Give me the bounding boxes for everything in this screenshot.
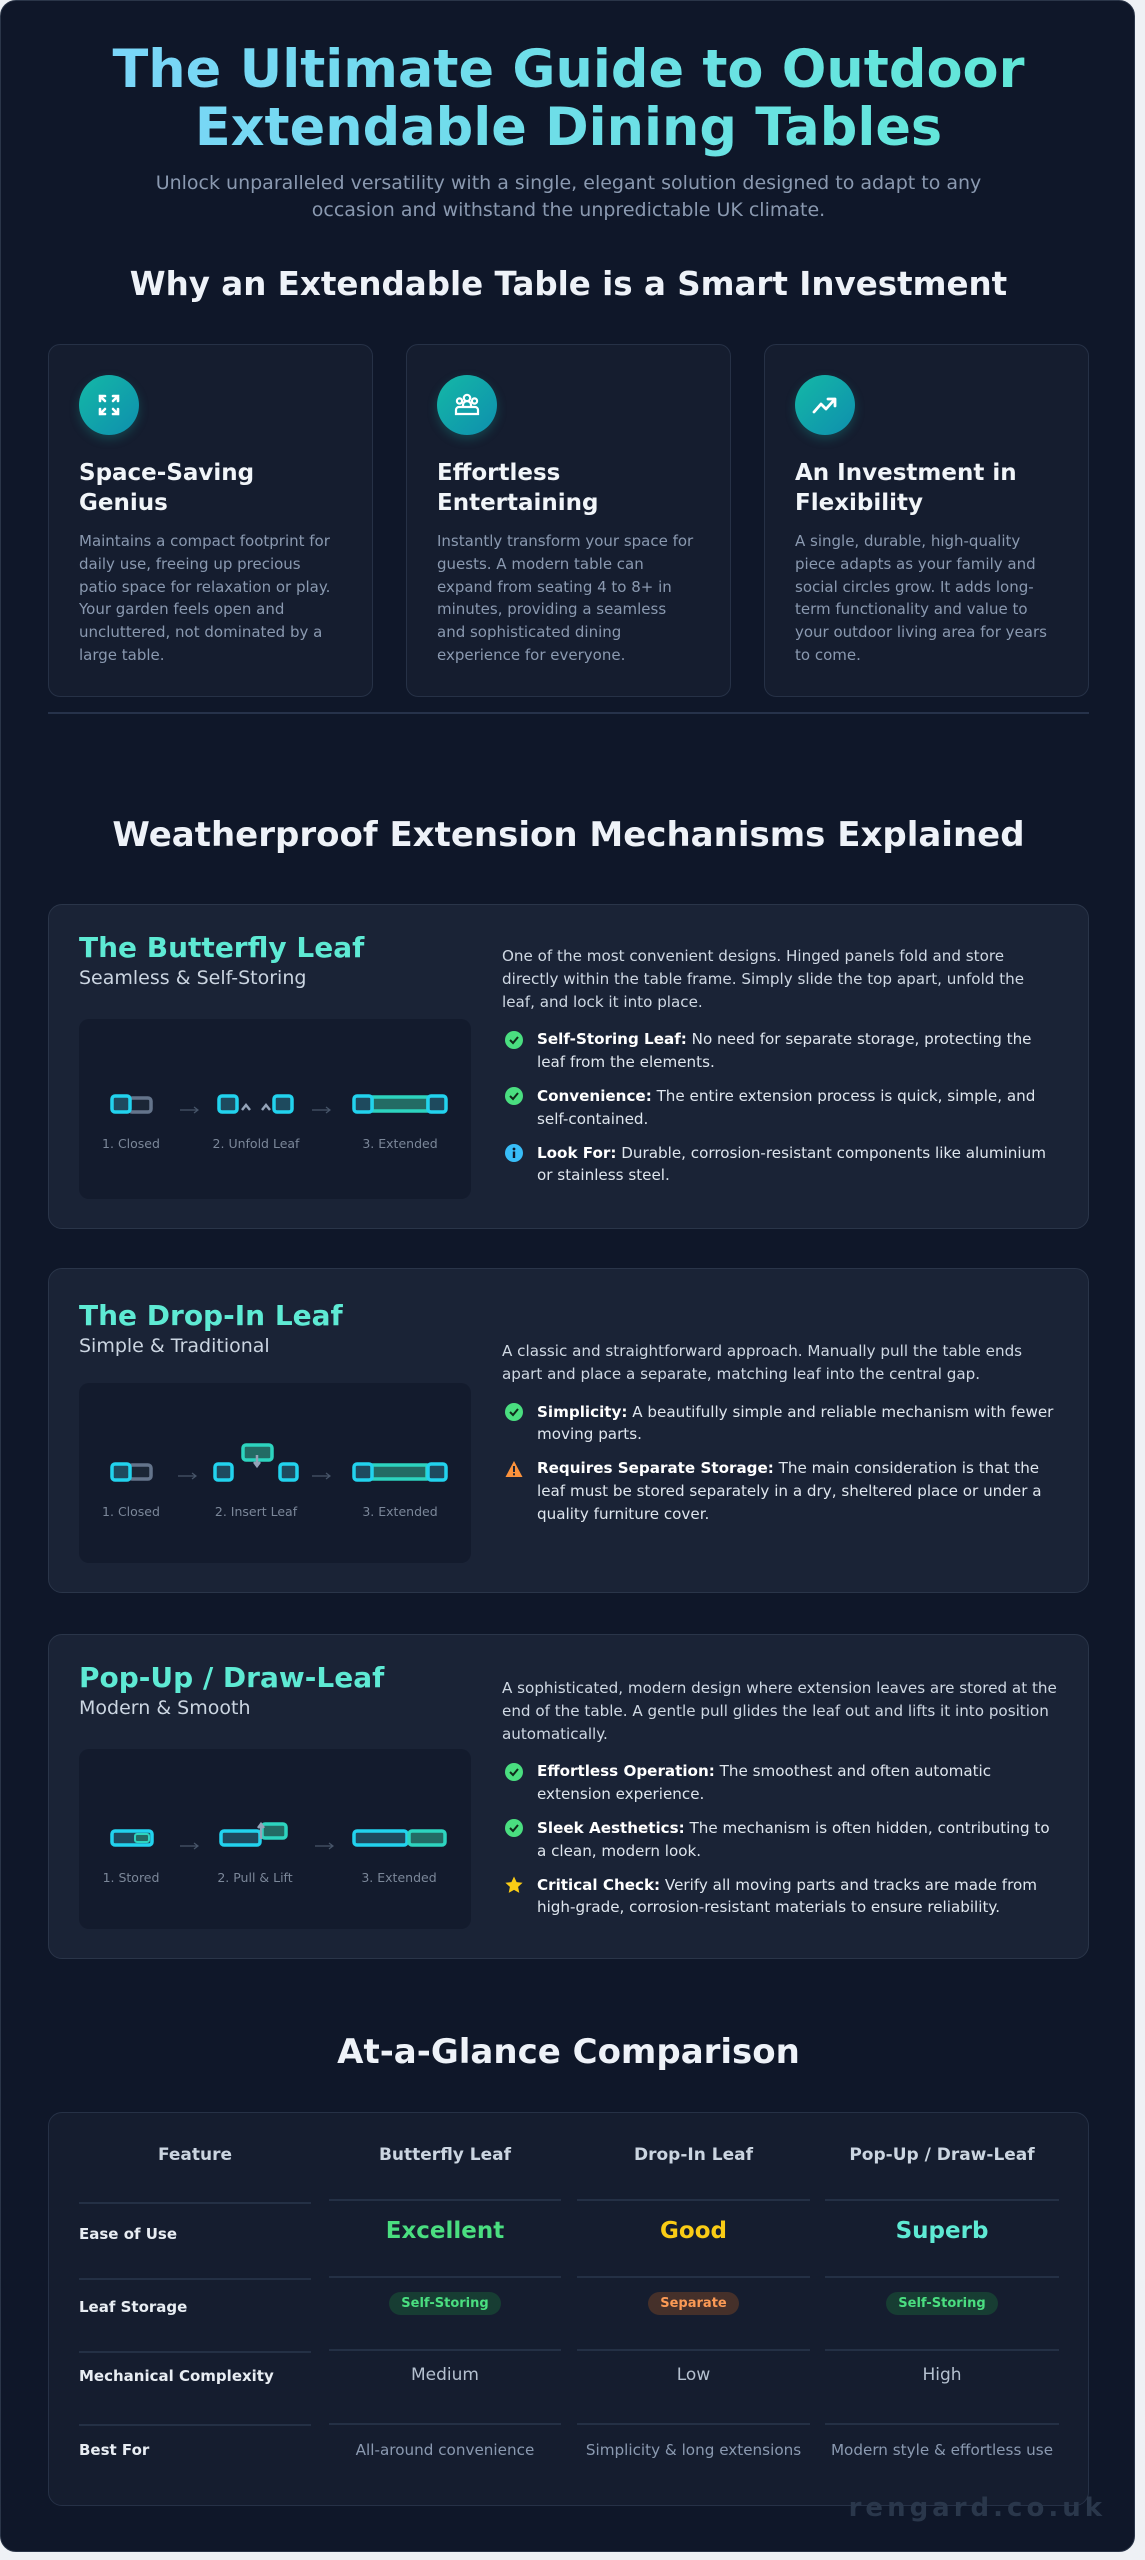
text: pop-up description [502, 1679, 1057, 1916]
icon: people [437, 375, 497, 435]
table header row: Feature [158, 2145, 232, 2165]
row: ease of use: Good [660, 2218, 727, 2244]
text: pop-up description: Critical Check: Verify all moving parts and tracks are made from high-grade, corrosion-resistant materials to ensure reliability. [537, 1876, 1037, 1916]
text: pop-up description: Effortless Operation: The smoothest and often automatic extension experience. [537, 1762, 991, 1803]
title [1, 41, 1136, 157]
table header row: Pop-Up / Draw-Leaf [849, 2145, 1035, 2165]
row: leaf storage: Leaf Storage [79, 2298, 187, 2316]
text: pop-up description: A sophisticated, modern design where extension leaves are stored at the end of the table. A gentle pull glides the leaf out and lifts it into position automatically. [502, 1679, 1057, 1743]
text: butterfly description: Self-Storing Leaf: No need for separate storage, protecting the leaf from the elements. [537, 1030, 1032, 1071]
diagram: butterfly [79, 1019, 471, 1199]
row: leaf storage: Self-Storing [898, 2296, 986, 2311]
card: space-saving: Space-Saving Genius [79, 460, 254, 516]
panel: drop-in leaf: The Drop-In Leaf [79, 1299, 343, 1332]
text: drop-in description [502, 1342, 1054, 1523]
text: drop-in description: A classic and straightforward approach. Manually pull the table ends apart and place a separate, matching leaf into the central gap. [502, 1342, 1022, 1383]
diagram: drop-in: 1. Closed [102, 1504, 160, 1519]
table header row: Drop-In Leaf [634, 2145, 753, 2165]
row: best for: All-around convenience [356, 2441, 534, 2459]
card: flexibility: A single, durable, high-quality piece adapts as your family and social circles grow. It adds long-term functionality and value to your outdoor living area for years to come. [795, 532, 1047, 664]
row: leaf storage [79, 2292, 998, 2316]
card: space-saving: Maintains a compact footprint for daily use, freeing up precious patio space for relaxation or play. Your garden feels open and uncluttered, not dominated by a large table. [79, 532, 330, 664]
row: leaf storage: Self-Storing [401, 2296, 489, 2311]
row: best for: Modern style & effortless use [831, 2441, 1053, 2459]
panel: pop-up leaf: Pop-Up / Draw-Leaf [79, 1661, 384, 1694]
title: The Ultimate Guide to Outdoor [112, 39, 1024, 100]
text: drop-in description: Simplicity: A beautifully simple and reliable mechanism with fewer moving parts. [537, 1403, 1053, 1443]
row: ease of use [79, 2218, 988, 2244]
text: butterfly description: One of the most convenient designs. Hinged panels fold and store directly within the table frame. Simply slide the top apart, unfold the leaf, and lock it into place. [502, 947, 1024, 1011]
heading: comparison: At-a-Glance Comparison [337, 2032, 800, 2072]
heading: why invest: Why an Extendable Table is a Smart Investment [130, 265, 1007, 303]
row: ease of use: Superb [896, 2218, 988, 2244]
icon: expand arrows [79, 375, 139, 435]
panel: drop-in leaf [48, 1268, 1089, 1593]
table header row [158, 2145, 1035, 2165]
row: best for: Best For [79, 2441, 149, 2459]
row: best for: Simplicity & long extensions [586, 2441, 801, 2459]
row: best for [79, 2441, 1053, 2459]
card: entertaining: Instantly transform your space for guests. A modern table can expand from seating 4 to 8+ in minutes, providing a seamless and sophisticated dining experience for everyone. [437, 532, 693, 664]
row: ease of use: Ease of Use [79, 2225, 177, 2243]
panel: butterfly leaf [48, 904, 1089, 1229]
diagram: pop-up: 1. Stored [103, 1870, 159, 1885]
row: ease of use: Excellent [386, 2218, 504, 2244]
table header row: Butterfly Leaf [379, 2145, 511, 2165]
row: mechanical complexity: Medium [411, 2365, 479, 2385]
panel: butterfly leaf: The Butterfly Leaf [79, 931, 364, 964]
title: Extendable Dining Tables [195, 97, 942, 158]
heading: mechanisms: Weatherproof Extension Mechanisms Explained [112, 815, 1025, 855]
text: drop-in description: Requires Separate Storage: The main consideration is that the leaf must be stored separately in a dry, sheltered place or under a quality furniture cover. [537, 1459, 1042, 1523]
diagram: butterfly: 3. Extended [362, 1136, 438, 1151]
row: leaf storage: Separate [660, 2296, 727, 2311]
subtitle: Unlock unparalleled versatility with a single, elegant solution designed to adapt to any occasion and withstand the unpredictable UK climate. [156, 172, 981, 221]
diagram: pop-up: 2. Pull & Lift [217, 1870, 293, 1885]
card: flexibility [764, 344, 1089, 697]
card: entertaining: Effortless Entertaining [437, 460, 599, 516]
text: butterfly description: Look For: Durable, corrosion-resistant components like aluminium or stainless steel. [537, 1144, 1046, 1184]
row: mechanical complexity: Low [677, 2365, 710, 2385]
panel: pop-up leaf [48, 1634, 1089, 1959]
watermark: rengard.co.uk [849, 2493, 1106, 2523]
card: space-saving [48, 344, 373, 697]
row: mechanical complexity: High [922, 2365, 962, 2385]
text: butterfly description: Convenience: The entire extension process is quick, simple, and self-contained. [537, 1087, 1035, 1128]
diagram: drop-in [79, 1383, 471, 1563]
card: flexibility: An Investment in Flexibility [795, 460, 1017, 516]
icon: trend up [795, 375, 855, 435]
card: entertaining [406, 344, 731, 697]
diagram: drop-in: 3. Extended [362, 1504, 438, 1519]
panel: butterfly leaf: Seamless & Self-Storing [79, 967, 306, 989]
diagram: drop-in: 2. Insert Leaf [215, 1504, 298, 1519]
panel: pop-up leaf: Modern & Smooth [79, 1697, 250, 1719]
text: butterfly description [502, 947, 1046, 1184]
diagram: butterfly: 1. Closed [102, 1136, 160, 1151]
text: pop-up description: Sleek Aesthetics: The mechanism is often hidden, contributing to a clean, modern look. [537, 1819, 1050, 1860]
diagram: pop-up [79, 1749, 471, 1929]
row: mechanical complexity [79, 2365, 962, 2385]
diagram: pop-up: 3. Extended [361, 1870, 437, 1885]
row: mechanical complexity: Mechanical Complexity [79, 2367, 274, 2385]
diagram: butterfly: 2. Unfold Leaf [213, 1136, 300, 1151]
comparison table [48, 2112, 1089, 2506]
panel: drop-in leaf: Simple & Traditional [79, 1335, 270, 1357]
